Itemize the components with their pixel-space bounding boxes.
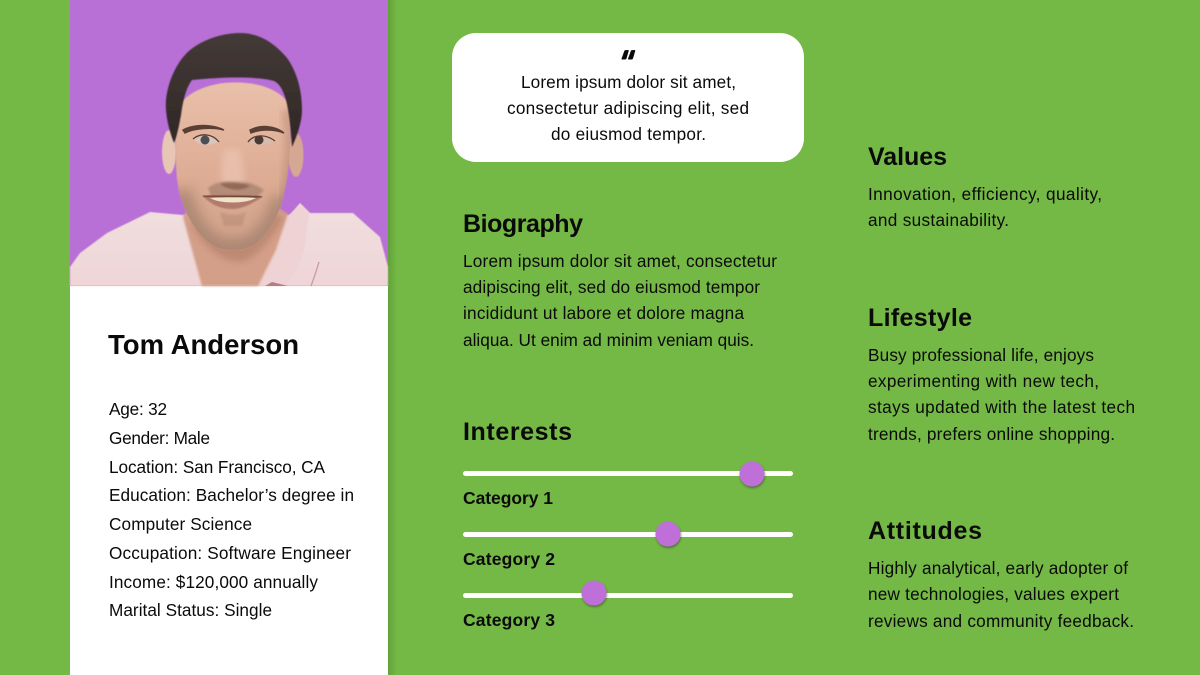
demographics list: Location: San Francisco, CA bbox=[109, 457, 326, 477]
attitudes text bbox=[868, 558, 1134, 631]
lifestyle text: Busy professional life, enjoys bbox=[868, 345, 1094, 365]
demographics list: Age: 32 bbox=[109, 399, 167, 419]
slider: category 3 bbox=[463, 580, 793, 630]
section: attitudes bbox=[868, 517, 1134, 631]
demographics list: Computer Science bbox=[109, 514, 252, 534]
biography text bbox=[463, 251, 777, 350]
values text: and sustainability. bbox=[868, 210, 1009, 230]
slider: category 2: Category 2 bbox=[463, 549, 555, 569]
section: values bbox=[868, 143, 1102, 230]
heading: biography: Biography bbox=[463, 210, 583, 238]
biography text: adipiscing elit, sed do eiusmod tempor bbox=[463, 277, 760, 297]
panel: quote bbox=[452, 33, 804, 162]
lifestyle text: stays updated with the latest tech bbox=[868, 397, 1135, 417]
heading: attitudes: Attitudes bbox=[868, 517, 982, 545]
demographics list: Education: Bachelor’s degree in bbox=[109, 485, 354, 505]
section: interests bbox=[463, 418, 793, 630]
biography text: Lorem ipsum dolor sit amet, consectetur bbox=[463, 251, 777, 271]
values text: Innovation, efficiency, quality, bbox=[868, 184, 1102, 204]
biography text: aliqua. Ut enim ad minim veniam quis. bbox=[463, 330, 754, 350]
section: lifestyle bbox=[868, 304, 1135, 444]
quote text: consectetur adipiscing elit, sed bbox=[507, 98, 749, 118]
lifestyle text bbox=[868, 345, 1135, 444]
heading: lifestyle: Lifestyle bbox=[868, 304, 972, 332]
attitudes text: reviews and community feedback. bbox=[868, 611, 1134, 631]
lifestyle text: experimenting with new tech, bbox=[868, 371, 1099, 391]
demographics list: Marital Status: Single bbox=[109, 600, 272, 620]
slider: category 2 bbox=[463, 522, 793, 569]
slider: category 1: Category 1 bbox=[463, 488, 553, 508]
slider: category 1 bbox=[463, 462, 793, 508]
demographics list: Gender: Male bbox=[109, 428, 210, 448]
demographics list: Income: $120,000 annually bbox=[109, 572, 318, 592]
slider: category 3: Category 3 bbox=[463, 610, 555, 630]
values text bbox=[868, 184, 1102, 230]
icon: quote mark bbox=[622, 50, 635, 60]
demographics list bbox=[109, 399, 354, 620]
demographics list: Occupation: Software Engineer bbox=[109, 543, 351, 563]
attitudes text: new technologies, values expert bbox=[868, 584, 1119, 604]
panel: profile card bbox=[70, 0, 397, 675]
heading: values: Values bbox=[868, 143, 947, 171]
name: Tom Anderson bbox=[108, 329, 299, 360]
quote text bbox=[507, 72, 749, 144]
quote text: do eiusmod tempor. bbox=[551, 124, 706, 144]
quote text: Lorem ipsum dolor sit amet, bbox=[521, 72, 736, 92]
attitudes text: Highly analytical, early adopter of bbox=[868, 558, 1128, 578]
section: biography bbox=[463, 210, 777, 350]
lifestyle text: trends, prefers online shopping. bbox=[868, 424, 1115, 444]
icon: portrait photo bbox=[70, 33, 388, 286]
biography text: incididunt ut labore et dolore magna bbox=[463, 303, 744, 323]
heading: interests: Interests bbox=[463, 418, 572, 446]
